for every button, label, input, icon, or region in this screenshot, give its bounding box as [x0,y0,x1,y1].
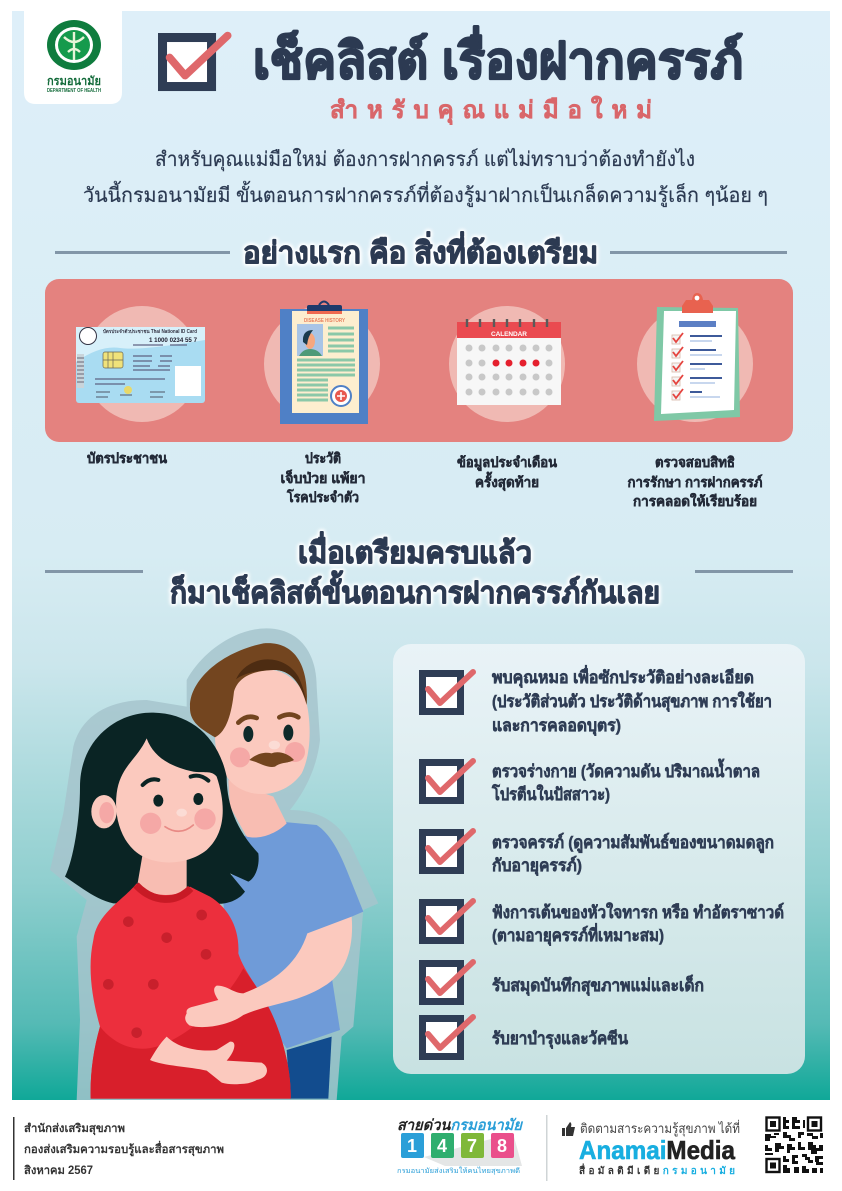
divider [546,1115,548,1181]
step 5 [422,962,704,1002]
QR code [765,1116,823,1174]
step 1: (ประวัติส่วนตัว ประวัติด้านสุขภาพ การใช้ยา [492,691,772,712]
icon: calendar [457,319,561,405]
footer: issuing office: สำนักส่งเสริมสุขภาพ [24,1121,125,1136]
woman: hair [65,713,259,904]
icon: national ID card [76,327,205,403]
man: shirt [223,822,363,1048]
icon: national ID card: 1 1000 0234 55 7 [149,338,198,344]
step 1: และการคลอดบุตร) [492,716,621,736]
footer: AnamaiMedia: สื่อมัลติมีเดีย กรมอนามัย [579,1163,735,1177]
intro text: วันนี้กรมอนามัยมี ขั้นตอนการฝากครรภ์ที่ต้องรู้มาฝากเป็นเกล็ดความรู้เล็ก ๆน้อย ๆ [83,181,768,208]
step 1 [422,665,772,736]
footer: AnamaiMedia [562,1120,740,1177]
halo [50,628,378,1100]
label: check rights: การรักษา การฝากครรภ์ [628,474,762,490]
logo: department of health [24,11,122,104]
man: neck [228,780,287,838]
footer: issuing office [13,1117,224,1180]
woman: dress [91,883,291,1099]
step 3: กับอายุครรภ์) [492,855,582,876]
icon: checklist clipboard [654,293,740,421]
step 4: (ตามอายุครรภ์ที่เหมาะสม) [492,923,664,946]
step 1: พบคุณหมอ เพื่อซักประวัติอย่างละเอียด [492,665,754,688]
logo: department of health: กรมอนามัย [47,74,101,88]
man: arm and hand [185,917,352,1027]
label: medical history: ประวัติ [305,450,341,466]
step 6: รับยาบำรุงและวัคซีน [492,1028,628,1049]
icon: national ID card: บัตรประจำตัวประชาชน Thai National ID Card [103,328,197,335]
woman: hand [150,1037,267,1084]
woman: dress dots [103,910,211,1038]
panel: documents to prepare [45,279,793,442]
step 3 [422,831,774,876]
footer: AnamaiMedia: ติดตามสาระความรู้สุขภาพ ได้ที่ [580,1120,740,1137]
step 6 [422,1017,628,1056]
footer: issuing office: สิงหาคม 2567 [24,1164,93,1177]
step 2 [422,758,760,804]
woman: ear [91,795,117,828]
heading: checklist steps: ก็มาเช็คลิสต์ขั้นตอนการฝากครรภ์กันเลย [170,570,660,610]
footer: hotline 1478: กรมอนามัยส่งเสริมให้คนไทยสุขภาพดี [397,1166,520,1175]
intro text: สำหรับคุณแม่มือใหม่ ต้องการฝากครรภ์ แต่ไม่ทราบว่าต้องทำยังไง [155,148,695,172]
footer: hotline 1478: 7 [467,1136,477,1156]
title: เช็คลิสต์ เรื่องฝากครรภ์ [253,26,743,89]
man: hair [190,643,307,737]
heading: what to prepare: อย่างแรก คือ สิ่งที่ต้องเตรียม [243,231,598,270]
footer: AnamaiMedia: AnamaiMedia [579,1135,735,1165]
icon: title checkbox [163,36,228,87]
label: last period: ข้อมูลประจำเดือน [457,454,557,471]
label: last period [457,454,557,491]
label: check rights: ตรวจสอบสิทธิ [655,454,735,470]
label: check rights [628,454,762,509]
icon: medical history clipboard [280,302,368,424]
panel: checklist [393,644,805,1074]
label: ID card: บัตรประชาชน [87,450,167,466]
step 4: ฟังการเต้นของหัวใจทารก หรือ ทำอัตราซาวด์ [492,902,784,922]
woman: face [116,738,223,862]
logo: department of health: DEPARTMENT OF HEALTH [47,88,101,94]
label: check rights: การคลอดให้เรียบร้อย [633,492,757,509]
heading: what to prepare [55,231,787,270]
label: medical history [280,450,366,505]
woman: belly shade [91,968,291,1099]
illustration: expecting couple [50,628,378,1100]
footer: issuing office: กองส่งเสริมความรอบรู้และสื่อสารสุขภาพ [24,1140,224,1157]
step 2: ตรวจร่างกาย (วัดความดัน ปริมาณน้ำตาล [492,758,760,781]
step 4 [422,901,784,946]
label: last period: ครั้งสุดท้าย [475,471,539,491]
intro text [83,148,768,208]
step 3: ตรวจครรภ์ (ดูความสัมพันธ์ของขนาดมดลูก [492,832,774,854]
woman: face details [140,776,216,834]
icon: calendar: CALENDAR [491,331,527,338]
label: medical history: เจ็บป่วย แพ้ยา [280,469,366,486]
man: jeans [287,1037,332,1099]
woman: collar [136,885,191,899]
icon: medical history clipboard: DISEASE HISTORY [304,318,346,324]
step 2: โปรตีนในปัสสาวะ) [491,784,610,804]
woman: neck [137,850,187,897]
step 5: รับสมุดบันทึกสุขภาพแม่และเด็ก [492,973,704,996]
heading: checklist steps [45,531,793,610]
footer: hotline 1478 [397,1117,523,1175]
label: medical history: โรคประจำตัว [286,488,359,505]
footer: hotline 1478: สายด่วนกรมอนามัย [397,1117,523,1134]
man: head [215,670,310,794]
man: hair shade [236,659,307,703]
subtitle: สำหรับคุณแม่มือใหม่ [330,95,652,126]
footer: hotline 1478: 4 [437,1136,447,1156]
footer: hotline 1478: 8 [497,1136,507,1156]
man: face details [230,714,305,767]
heading: checklist steps: เมื่อเตรียมครบแล้ว [298,531,532,570]
footer: hotline 1478: 1 [407,1136,417,1156]
